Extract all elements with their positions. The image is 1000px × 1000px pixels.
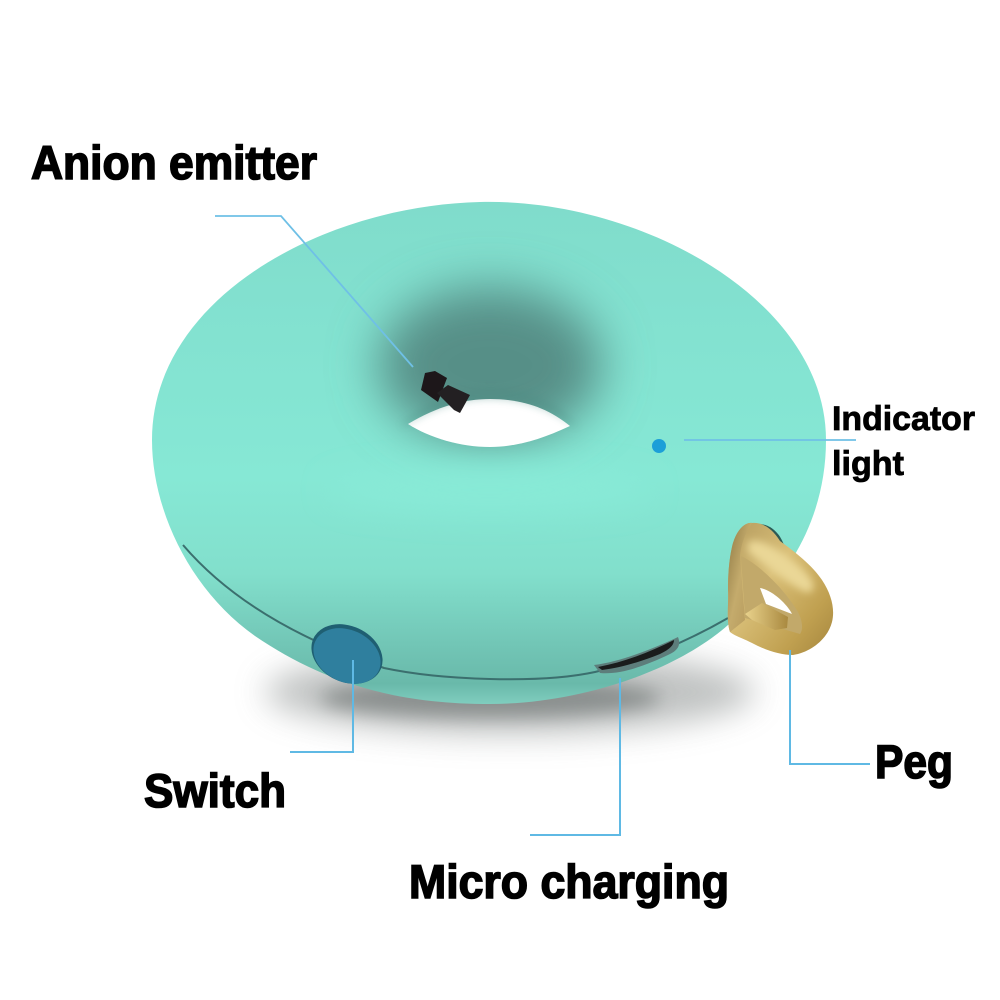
indicator light (652, 439, 666, 453)
label: micro charging: Micro charging (409, 855, 729, 908)
label: anion emitter: Anion emitter (31, 136, 317, 189)
leader: micro charging (530, 678, 620, 835)
bright front lip (330, 468, 650, 512)
label: indicator light (832, 400, 975, 483)
lower seam (183, 545, 728, 679)
leader: indicator light (684, 439, 856, 441)
leader: switch (290, 660, 353, 752)
donut hole (408, 399, 570, 447)
leader: anion emitter (215, 216, 413, 367)
gold peg (728, 523, 833, 655)
product diagram (31, 144, 975, 909)
label: indicator light: Indicator (832, 400, 975, 438)
donut body (152, 202, 826, 704)
switch button (302, 613, 392, 695)
peg back ring (738, 524, 784, 560)
ground shadow (265, 650, 755, 734)
inner funnel shading (378, 287, 602, 443)
hole upper shadow (400, 388, 578, 428)
peg highlight (748, 541, 813, 592)
label: switch: Switch (144, 764, 286, 817)
label: indicator light: light (832, 445, 904, 483)
icon: anion emitter brush (421, 371, 470, 413)
micro USB port (594, 637, 679, 673)
peg inner bar (745, 603, 788, 630)
label: peg: Peg (875, 735, 953, 788)
peg front face (728, 523, 752, 632)
peg opening (741, 556, 802, 634)
peg outer (728, 523, 833, 655)
leader: peg (790, 650, 870, 764)
